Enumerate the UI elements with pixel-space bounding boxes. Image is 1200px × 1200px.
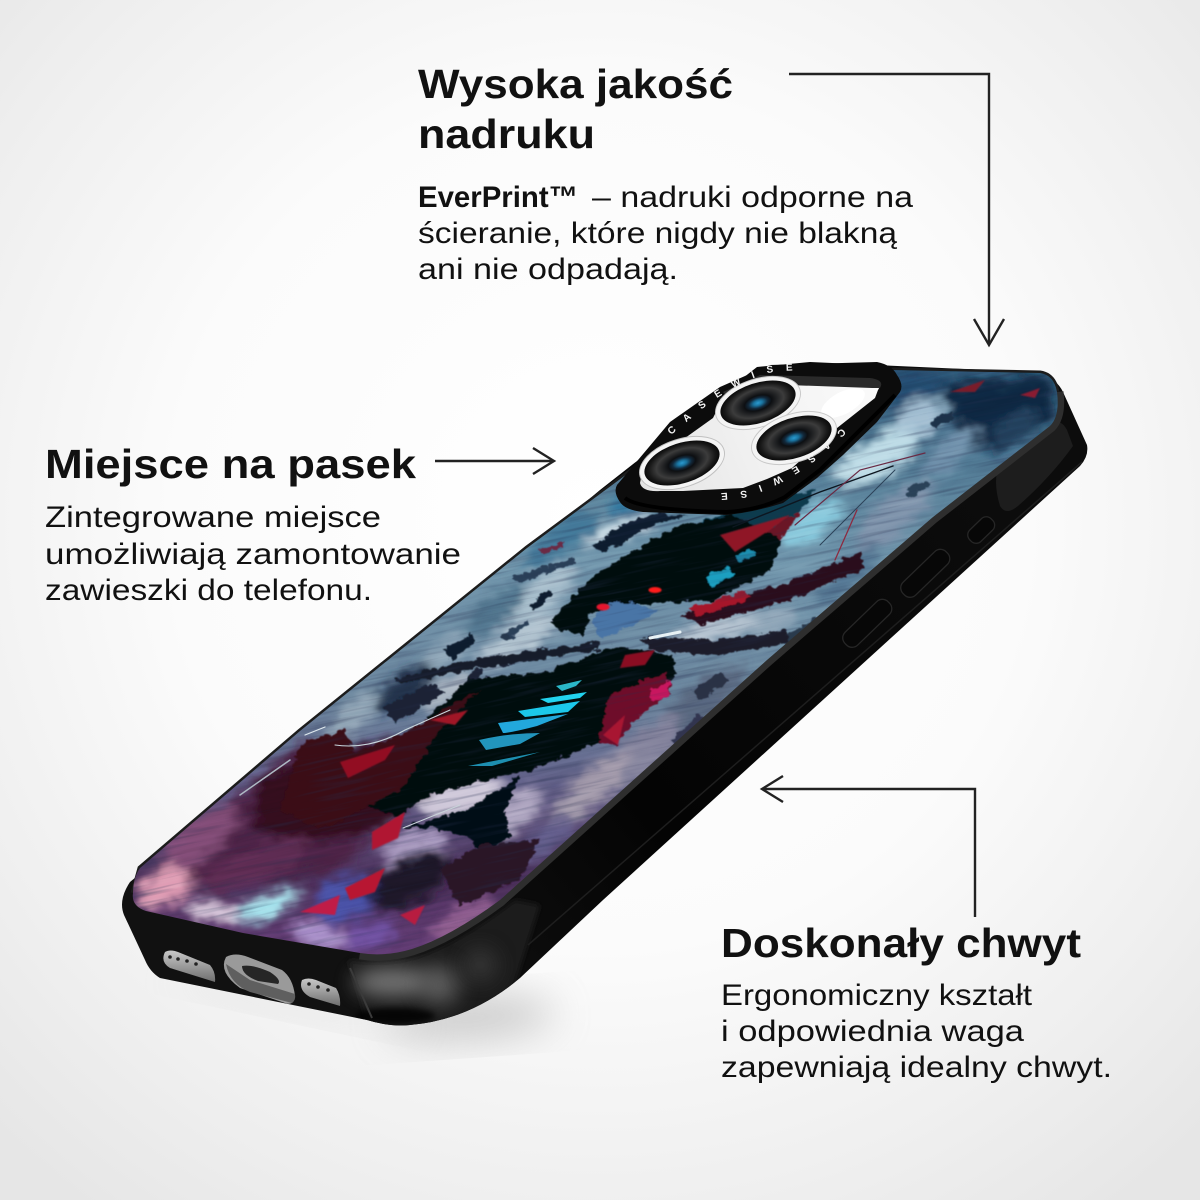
callout: grip [721,776,1112,1084]
lens right [745,402,843,474]
torso [355,646,676,815]
arrow: to camera bump [435,448,554,474]
description: Zintegrowane miejsce [45,501,381,534]
lower lavender clouds [415,769,509,827]
description [418,181,913,286]
right spiked arm [640,630,790,655]
crimson flakes [598,672,672,745]
camera opening [640,380,879,491]
phone shadow [171,968,556,1044]
upper left sky [518,510,601,569]
description: zawieszki do telefonu. [45,574,372,607]
screen rim [360,392,1058,954]
red accents and eyes [300,380,1040,925]
description: ani nie odpadają. [418,253,678,286]
heading [418,61,733,157]
case body [122,362,1087,1025]
back artwork [132,370,1058,954]
face [590,600,660,637]
ring lettering [668,364,845,500]
left grill [163,950,215,982]
cyan patch by the crown [705,566,735,586]
heading: Miejsce na pasek [45,441,416,487]
side switch [996,421,1073,511]
callout: print quality [418,61,1004,345]
arrow: to phone side [762,776,975,917]
lower maroon mass [440,840,540,905]
maroon sweep [156,732,403,888]
description [45,501,461,607]
heading: Doskonały chwyt [721,920,1081,966]
dark flake [403,775,520,850]
description: EverPrint™ [418,181,578,214]
camera bump [616,362,902,515]
phone case [122,362,1088,1026]
lens top [709,367,807,439]
cyan ribs [468,680,587,766]
heading: Wysoka jakość [418,61,733,107]
description: Ergonomiczny kształt [721,979,1033,1012]
dark motion streaks [133,372,1057,950]
streak texture [134,370,1058,954]
painted clouds [131,372,1055,955]
rim upper edge [133,370,1057,893]
description: – nadruki odporne na [592,181,913,214]
lower left pink and cyan [131,861,199,915]
crown [700,488,816,528]
description: umożliwiają zamontowanie [45,538,461,571]
right of figure [667,610,764,642]
description [721,979,1112,1084]
description: ścieranie, które nigdy nie blakną [418,217,897,250]
side buttons [839,514,998,651]
glossy bottom corner [348,462,1082,1030]
top right sky [940,375,1055,455]
ring lettering: CASEWISE [668,364,792,434]
arrow: to phone top corner [789,74,1004,345]
callout: strap slot [45,441,554,607]
cape [280,690,480,830]
figure [280,490,865,905]
right grill [301,978,340,1006]
charging port and speaker grills [163,950,340,1006]
upper right arm [680,553,865,625]
charging port [224,954,295,1004]
sky flakes [383,412,955,748]
thin spikes and highlights [240,453,925,828]
heading: nadruku [418,111,595,157]
description: i odpowiednia waga [721,1015,1024,1048]
description: zapewniają idealny chwyt. [721,1051,1112,1084]
lens left [633,427,731,499]
left spiked arm [395,642,600,684]
ring lettering: CASEWISE [721,430,845,500]
hair [550,515,782,636]
